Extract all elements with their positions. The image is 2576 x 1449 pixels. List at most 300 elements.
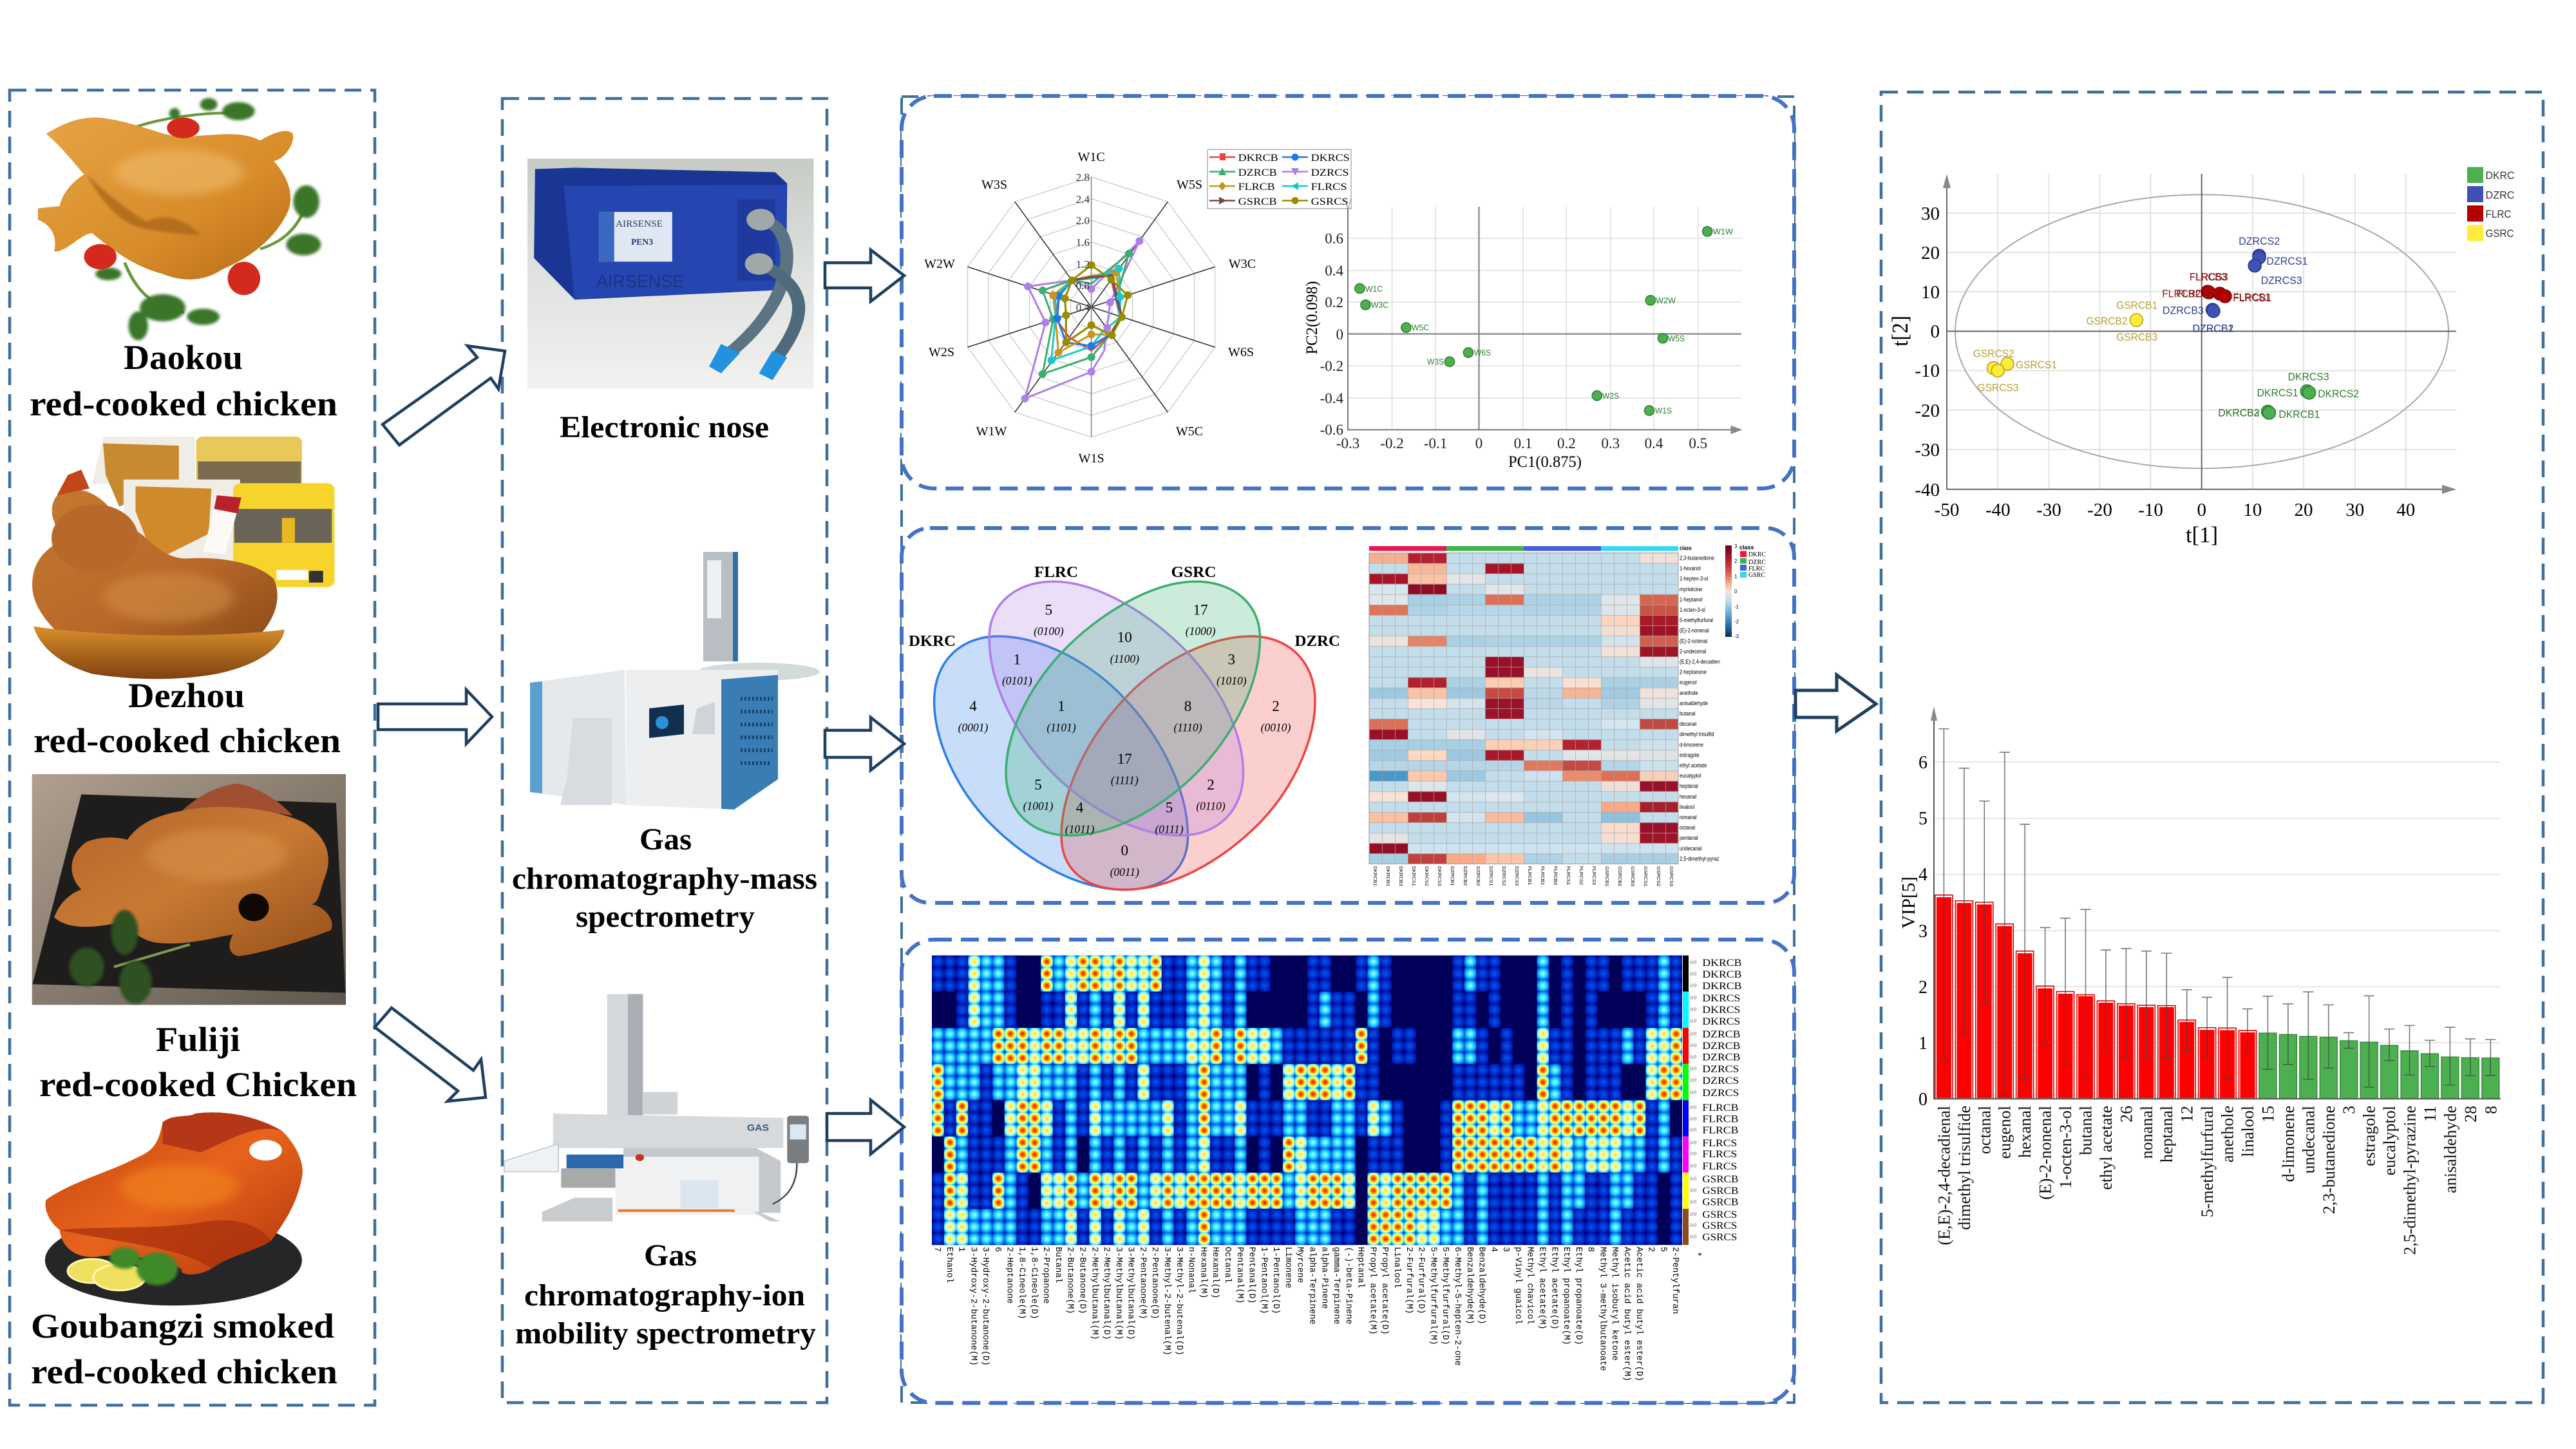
gallery plot sample labels: FLRCS <box>1702 1161 1737 1172</box>
point labels: W5C <box>1412 323 1429 332</box>
score point labels: DKRCB3 <box>2218 407 2259 419</box>
compound labels: dimethyl trisulfide <box>1955 1106 1974 1230</box>
y tick labels: 3 <box>1918 922 1927 942</box>
panel: chicken samples <box>10 90 375 1405</box>
radar vertical axis <box>1091 177 1092 437</box>
label: Gas (GC-IMS): Gas <box>644 1238 697 1273</box>
heatmap row labels: 5-methylfurfural <box>1680 616 1713 623</box>
heatmap row labels: butanal <box>1680 710 1696 717</box>
gallery plot 0/0 row markers: 0/0 <box>1690 1222 1696 1228</box>
compound labels: estragole <box>2360 1106 2379 1166</box>
Venn counts: 1 <box>1057 698 1065 714</box>
arrow: GC-MS to results <box>825 717 904 770</box>
arrow: results to multivariate analysis <box>1795 675 1876 731</box>
x tick labels: 0 <box>1475 435 1482 451</box>
x tick labels: 0 <box>2197 500 2206 520</box>
gallery plot compound labels: 5-Methylfurfural(D) <box>1440 1247 1450 1345</box>
gallery plot compound labels: Acetic acid butyl ester(M) <box>1622 1247 1631 1381</box>
class legend: class <box>1739 544 1754 551</box>
heatmap column labels <box>1372 866 1674 886</box>
gallery plot sample labels: DZRCB <box>1702 1052 1740 1063</box>
heatmap column labels: FLRCS3 <box>1591 866 1597 885</box>
y tick labels: 10 <box>1921 282 1940 303</box>
gallery plot 0/0 row markers: 0/0 <box>1690 1077 1696 1083</box>
gallery plot sample labels: FLRCS <box>1702 1138 1737 1149</box>
gallery plot compound labels: Heptanal <box>1356 1247 1365 1288</box>
confidence ellipse <box>1955 194 2448 468</box>
gallery plot compound labels: Propyl acetate(D) <box>1379 1247 1389 1335</box>
Venn counts: 17 <box>1193 601 1208 618</box>
gallery plot compound labels: Ethyl acetate(M) <box>1537 1247 1547 1330</box>
y tick labels: -20 <box>1915 401 1940 421</box>
compound labels: 3 <box>2340 1106 2358 1114</box>
score point labels: FLRCS1 <box>2233 291 2270 303</box>
gallery plot sample labels: FLRCB <box>1702 1125 1738 1136</box>
x tick labels: 40 <box>2396 500 2415 520</box>
heatmap row labels: anethole <box>1680 689 1698 696</box>
heatmap row labels: 1-heptanol <box>1680 596 1702 603</box>
radar tick labels: 2.4 <box>1076 193 1090 205</box>
x tick labels: -0.3 <box>1336 435 1359 451</box>
Venn region codes <box>958 625 1291 878</box>
radar axis labels: W3S <box>981 178 1007 192</box>
point labels: W6S <box>1474 348 1491 357</box>
gallery plot compound labels: Methyl 3-methylbutanoate <box>1597 1247 1607 1371</box>
radar legend: DKRCB <box>1238 153 1278 164</box>
gallery plot compound labels: Hexanal(M) <box>1198 1247 1208 1298</box>
radar axis labels: W2W <box>924 257 955 271</box>
radar series <box>1025 241 1139 399</box>
Venn region codes: (1011) <box>1065 822 1094 835</box>
heatmap row labels: dimethyl trisulfid <box>1680 730 1714 737</box>
Venn ellipses <box>934 582 1315 889</box>
heatmap column labels: FLRCB3 <box>1553 866 1558 885</box>
photo: Daokou red-cooked chicken <box>38 98 321 340</box>
arrow: GC-IMS to results <box>827 1100 904 1154</box>
x tick labels: 0.2 <box>1557 435 1576 451</box>
gallery plot sample labels: GSRCB <box>1702 1174 1738 1185</box>
score point labels: FLRCS3 <box>2190 270 2228 283</box>
stray marker: * <box>1698 1251 1702 1261</box>
gallery plot 0/0 row markers: 0/0 <box>1690 971 1696 977</box>
heatmap column labels: DZRCS2 <box>1501 866 1507 886</box>
point labels: W1C <box>1365 284 1383 294</box>
radar axis labels: W1W <box>976 424 1007 439</box>
gallery plot sample labels: DKRCB <box>1702 969 1741 980</box>
score point labels <box>1973 235 2359 421</box>
gallery plot 0/0 row markers: 0/0 <box>1690 1163 1696 1169</box>
gallery plot sample labels: FLRCB <box>1702 1114 1738 1124</box>
gallery plot sample labels: DZRCS <box>1702 1064 1739 1075</box>
score point labels: DZRCS1 <box>2266 255 2307 267</box>
Venn region codes: (0101) <box>1002 674 1032 687</box>
arrow: samples to electronic nose <box>383 346 505 445</box>
Venn counts <box>969 601 1280 858</box>
heatmap column labels: GSRCB1 <box>1604 866 1610 886</box>
radar tick labels: 0.4 <box>1076 301 1090 314</box>
gallery plot compound labels: 2 <box>1646 1247 1656 1252</box>
compound labels: octanal <box>1975 1106 1994 1154</box>
heatmap column labels: GSRCS2 <box>1656 866 1662 886</box>
y tick labels: -40 <box>1915 480 1940 500</box>
y tick labels: -10 <box>1915 361 1940 381</box>
heatmap column labels: DKRCB3 <box>1398 866 1404 886</box>
Venn counts: 8 <box>1184 698 1191 714</box>
gallery plot compound labels: Pentanal(M) <box>1235 1247 1244 1303</box>
class legend: FLRC <box>1748 565 1765 573</box>
gallery plot 0/0 row markers: 0/0 <box>1690 1031 1696 1037</box>
photo: GC-IMS instrument <box>504 994 809 1222</box>
gallery plot compound labels: 2-Pentanone(M) <box>1137 1247 1147 1319</box>
gallery plot compound labels: 3 <box>1501 1247 1510 1252</box>
Venn counts: 0 <box>1121 842 1128 858</box>
score point labels: GSRCS1 <box>2016 359 2057 371</box>
gallery plot compound labels: gamma-Terpinene <box>1331 1247 1341 1325</box>
brand text GAS: GAS <box>747 1122 769 1133</box>
score point labels: GSRCS2 <box>1973 348 2014 360</box>
gallery plot compound labels: 6 <box>992 1247 1002 1252</box>
y axis title: PC2(0.098) <box>1303 281 1321 354</box>
radar legend <box>1208 149 1351 209</box>
heatmap row labels: octanal <box>1680 824 1695 831</box>
gallery plot sample labels: DZRCB <box>1702 1041 1740 1052</box>
heatmap column labels: FLRCS2 <box>1578 866 1584 885</box>
gallery plot compound labels: 2-Butanone(D) <box>1077 1247 1087 1314</box>
radar axis labels: W1C <box>1077 150 1105 164</box>
group legend <box>2467 167 2514 241</box>
gallery plot compound labels: 5 <box>1658 1247 1667 1252</box>
heatmap row labels: class <box>1680 544 1692 551</box>
Venn counts: 5 <box>1034 777 1042 793</box>
x tick labels: 30 <box>2345 500 2364 520</box>
panel: analytical instruments <box>502 99 827 1403</box>
compound labels: nonanal <box>2137 1106 2156 1159</box>
compound labels: linalool <box>2239 1106 2257 1157</box>
Venn region codes: (1010) <box>1217 674 1247 687</box>
heatmap row labels: 2,3-butanedione <box>1680 554 1714 562</box>
compound labels: 15 <box>2259 1106 2277 1122</box>
y tick labels: 2 <box>1918 978 1927 998</box>
radar legend: FLRCB <box>1238 182 1275 193</box>
colour scale: 0 <box>1734 589 1738 594</box>
gallery plot sample labels: DZRCS <box>1702 1088 1739 1099</box>
compound labels: 2,3-butanedione <box>2320 1106 2338 1214</box>
compound labels: undecanal <box>2299 1106 2318 1173</box>
class legend: GSRC <box>1748 571 1765 579</box>
compound labels: 11 <box>2421 1106 2439 1122</box>
gallery plot sample labels: GSRCS <box>1702 1209 1737 1220</box>
heatmap row labels: myristicine <box>1680 585 1702 592</box>
gallery plot sample labels: GSRCB <box>1702 1186 1738 1197</box>
axes <box>1947 174 2456 489</box>
compound labels: eugenol <box>1996 1106 2014 1159</box>
gallery plot compound labels: 1-Pentanol(M) <box>1258 1247 1268 1314</box>
photo: electronic nose instrument <box>527 158 814 389</box>
radar axis labels: W5S <box>1177 178 1202 192</box>
gallery plot 0/0 row markers: 0/0 <box>1690 1176 1696 1182</box>
gallery plot 0/0 row markers: 0/0 <box>1690 1199 1696 1205</box>
Venn region codes: (0110) <box>1196 800 1226 813</box>
score point labels: DZRCS3 <box>2261 274 2302 287</box>
y tick labels: -0.2 <box>1320 358 1343 374</box>
heatmap column labels: DKRCB1 <box>1372 866 1378 886</box>
heatmap column labels: DZRCB1 <box>1450 866 1455 886</box>
radar tick labels: 2.0 <box>1076 214 1090 227</box>
gallery plot 0/0 row markers: 0/0 <box>1690 1054 1696 1060</box>
y tick labels <box>1918 753 1927 1110</box>
Venn region codes: (1111) <box>1111 773 1139 786</box>
heatmap row labels: undecanal <box>1680 844 1702 852</box>
class legend: DKRC <box>1748 551 1766 558</box>
photo: GC-MS instrument <box>530 552 820 810</box>
compound labels: heptanal <box>2157 1106 2176 1162</box>
y tick labels: -30 <box>1915 440 1940 460</box>
x tick labels: -20 <box>2087 500 2112 520</box>
gallery plot sample labels: DZRCB <box>1702 1029 1740 1040</box>
gallery plot 0/0 row markers: 0/0 <box>1690 1090 1696 1095</box>
gallery plot compound labels: 2-Methylbutanal(M) <box>1089 1247 1099 1340</box>
gallery plot compound labels: Linalool <box>1392 1247 1401 1288</box>
Venn set names: DKRC <box>909 633 956 650</box>
x tick labels: 0.1 <box>1514 435 1532 451</box>
panel: GC-IMS gallery plot <box>902 940 1794 1403</box>
horizontal grid <box>1934 762 2501 1043</box>
compound labels: (E)-2-nonenal <box>2036 1106 2055 1200</box>
gallery plot compound labels: 4 <box>1488 1247 1498 1252</box>
y tick labels <box>1320 231 1343 438</box>
gallery plot compound labels: 1,8-Cineole(D) <box>1028 1247 1038 1319</box>
gallery plot sample labels: DKRCB <box>1702 981 1741 992</box>
score point labels: FLRCS2 <box>2177 287 2215 300</box>
heatmap row labels <box>1680 544 1720 862</box>
point labels <box>1365 227 1734 415</box>
Venn counts: 4 <box>969 698 977 714</box>
Venn region codes: (1110) <box>1173 721 1202 734</box>
y tick labels: 0 <box>1336 327 1343 343</box>
x tick labels: 10 <box>2243 500 2262 520</box>
gallery plot compound labels: 2-Butanone(M) <box>1065 1247 1075 1314</box>
gallery plot 0/0 row markers: 0/0 <box>1690 1211 1696 1217</box>
Venn set names: FLRC <box>1034 564 1078 581</box>
gallery plot sample labels: DZRCS <box>1702 1075 1739 1086</box>
gallery plot compound labels: n-Nonanal <box>1186 1247 1196 1293</box>
heatmap column labels: DKRCS2 <box>1424 866 1430 886</box>
photo: Dezhou red-cooked chicken <box>32 437 334 679</box>
gallery plot compound labels: Butanal <box>1053 1247 1063 1283</box>
gallery plot compound labels: Ethanol <box>944 1247 954 1283</box>
panel: multivariate analysis <box>1881 92 2543 1403</box>
heatmap row labels: 2-heptanone <box>1680 668 1707 676</box>
score point labels: FLRCB3 <box>2190 270 2227 283</box>
score point labels: DKRCB2 <box>2218 407 2259 419</box>
Venn region codes: (1000) <box>1186 625 1216 638</box>
gallery plot compound labels: Propyl acetate(M) <box>1367 1247 1377 1335</box>
gallery plot compound labels: Ethyl propanoate(D) <box>1573 1247 1583 1345</box>
chart: VIP bar chart <box>1899 706 2501 1255</box>
gallery plot compound labels: Ethyl acetate(D) <box>1549 1247 1558 1330</box>
gallery plot 0/0 row markers: 0/0 <box>1690 1140 1696 1146</box>
heatmap row labels: decanal <box>1680 720 1696 727</box>
heatmap column labels: GSRCB3 <box>1630 866 1636 886</box>
Venn region codes: (1100) <box>1110 652 1139 665</box>
colour scale: 1 <box>1734 574 1738 580</box>
compound labels: eucalyptol <box>2380 1106 2399 1175</box>
Venn set names <box>909 564 1340 650</box>
heatmap column labels: DZRCB2 <box>1463 866 1468 886</box>
gallery plot compound labels: 2-Pentylfuran <box>1670 1247 1680 1314</box>
radar tick labels: 1.6 <box>1076 236 1090 249</box>
grid lines <box>1947 174 2456 489</box>
heatmap column labels: GSRCS1 <box>1643 866 1649 886</box>
loading points <box>1355 227 1712 415</box>
x tick labels: -50 <box>1935 500 1959 520</box>
y tick labels: -0.4 <box>1320 390 1343 406</box>
gallery plot compound labels: p-Vinyl guaicol <box>1513 1247 1522 1325</box>
score point labels: GSRCB3 <box>2116 331 2157 343</box>
Venn region codes: (0010) <box>1261 721 1291 734</box>
x tick labels: -40 <box>1985 500 2011 520</box>
photo: Goubangzi smoked red-cooked chicken <box>45 1112 303 1305</box>
gallery plot compound labels: 7 <box>932 1247 942 1252</box>
y axis title: VIP[5] <box>1899 876 1919 929</box>
radar rings <box>967 177 1215 437</box>
group legend: DZRC <box>2486 189 2514 201</box>
gallery plot 0/0 row markers: 0/0 <box>1690 983 1696 989</box>
score point labels: DZRCB3 <box>2163 304 2204 317</box>
gallery plot 0/0 row markers: 0/0 <box>1690 1018 1696 1024</box>
Venn counts: 10 <box>1117 629 1132 645</box>
gallery plot compound labels: Methyl isobutyl ketone <box>1609 1247 1619 1361</box>
gallery plot compound labels: Hexanal(D) <box>1210 1247 1220 1298</box>
heatmap row labels: 1-octen-3-ol <box>1680 606 1705 613</box>
heatmap column labels: FLRCB1 <box>1527 866 1533 885</box>
point labels: W1W <box>1713 227 1734 236</box>
x tick labels: -10 <box>2138 500 2163 520</box>
gallery plot compound labels: 1-Pentanol(D) <box>1271 1247 1280 1314</box>
compound labels: anethole <box>2219 1106 2237 1162</box>
score point labels: DKRCS3 <box>2288 371 2329 383</box>
chart: PCA loading plot <box>1303 198 1741 471</box>
score point labels: DKRCB1 <box>2278 408 2320 421</box>
class bar <box>1369 546 1678 551</box>
gallery plot compound labels: 2-Methylbutanal(D) <box>1101 1247 1111 1340</box>
x tick labels: -30 <box>2036 500 2061 520</box>
Venn counts: 5 <box>1166 800 1173 816</box>
x tick labels: 0.4 <box>1645 435 1663 451</box>
radar legend: DZRCB <box>1238 167 1277 178</box>
heatmap column labels: FLRCB2 <box>1540 866 1546 885</box>
heatmap row labels: nonanal <box>1680 813 1697 820</box>
gallery plot 0/0 row markers: 0/0 <box>1690 1007 1696 1012</box>
label: chromatography-mass: chromatography-mass <box>512 862 817 896</box>
radar axis labels: W1S <box>1079 451 1104 466</box>
Venn region codes: (0100) <box>1034 625 1064 638</box>
gallery plot fingerprint cells <box>932 956 1682 1245</box>
class legend <box>1739 544 1766 579</box>
Venn region codes: (1001) <box>1023 800 1053 813</box>
compound labels: 2,5-dimethyl-pyrazine <box>2401 1106 2419 1255</box>
compound labels: (E,E)-2,4-decadienal <box>1935 1106 1953 1245</box>
heatmap row labels: 2-undecenal <box>1680 647 1706 655</box>
label: Goubangzi smoked: Goubangzi smoked <box>31 1307 334 1345</box>
zero lines and axes <box>1348 207 1741 430</box>
gallery plot sample labels: GSRCB <box>1702 1197 1738 1208</box>
score point labels: GSRCB2 <box>2087 315 2128 327</box>
y axis arrowhead <box>1931 706 1937 721</box>
point labels: W2S <box>1602 391 1619 401</box>
heatmap row labels: 1-hepten-3-ol <box>1680 575 1709 582</box>
score point labels: FLRCB1 <box>2233 292 2271 304</box>
heatmap row labels: (E)-2-octenal <box>1680 637 1707 645</box>
Venn counts: 5 <box>1045 601 1052 618</box>
radar tick labels: 1.2 <box>1076 258 1090 270</box>
Venn region codes: (0001) <box>958 721 988 734</box>
y tick labels: 6 <box>1918 753 1927 773</box>
compound labels: 5-methylfurfural <box>2198 1106 2217 1217</box>
Venn counts: 1 <box>1014 652 1021 667</box>
gallery plot 0/0 row markers: 0/0 <box>1690 1043 1696 1048</box>
score point labels: DZRCB2 <box>2192 323 2233 335</box>
colour scale: 2 <box>1734 558 1738 564</box>
panel: data analysis column <box>902 97 1794 1403</box>
chart: Venn diagram <box>909 564 1340 889</box>
x tick labels <box>1935 500 2415 520</box>
radar axis labels: W5C <box>1176 424 1203 439</box>
label: Fuliji red-cooked Chicken: red-cooked Chicken <box>39 1065 357 1104</box>
compound labels: butanal <box>2076 1106 2096 1155</box>
gallery plot compound labels: 3-Methyl-2-butenal(D) <box>1174 1247 1184 1356</box>
point labels: W1S <box>1655 406 1672 415</box>
gallery plot compound labels: 2-Propanone <box>1041 1247 1050 1303</box>
radar tick labels: 0.8 <box>1076 279 1090 292</box>
heatmap row labels: eugenol <box>1680 679 1697 686</box>
bars and error bars <box>1935 729 2499 1099</box>
gallery plot compound labels: 3-Hydroxy-2-butanone(D) <box>980 1247 990 1366</box>
y tick labels: 0.4 <box>1325 263 1343 279</box>
radar legend: GSRCS <box>1311 196 1349 207</box>
gallery plot compound labels <box>932 1247 1680 1381</box>
heatmap row labels: 1-hexanol <box>1680 565 1701 572</box>
point labels: W3S <box>1427 357 1444 366</box>
gallery plot 0/0 row markers: 0/0 <box>1690 1234 1696 1240</box>
radar legend: GSRCB <box>1238 196 1277 207</box>
gallery plot sample labels: FLRCB <box>1702 1103 1738 1113</box>
photo: Fuliji red-cooked chicken <box>32 774 346 1005</box>
group legend: FLRC <box>2486 208 2512 220</box>
heatmap column labels: GSRCS3 <box>1669 866 1674 886</box>
gallery plot compound labels: Limonene <box>1283 1247 1293 1288</box>
x tick labels: -0.1 <box>1424 435 1447 451</box>
arrow: electronic nose to results <box>825 250 904 301</box>
score point labels: FLRCB2 <box>2162 287 2201 300</box>
y tick labels: 5 <box>1918 809 1927 829</box>
gallery plot compound labels: 3-Hydroxy-2-butanone(M) <box>968 1247 978 1366</box>
compound labels: d-limonene <box>2279 1106 2298 1182</box>
y axis title: t[2] <box>1888 316 1913 346</box>
heatmap row labels: anisaldehyde <box>1680 699 1708 706</box>
heatmap row labels: linalool <box>1680 803 1694 810</box>
axis arrowheads <box>1943 174 2456 494</box>
instrument screen text AIRSENSE: AIRSENSE <box>616 219 663 229</box>
label: Dezhou red-cooked chicken: red-cooked chicken <box>33 721 341 760</box>
gallery plot 0/0 row markers: 0/0 <box>1690 1104 1696 1110</box>
label: Fuliji: Fuliji <box>156 1020 240 1059</box>
gallery plot compound labels: Myrcene <box>1295 1247 1305 1283</box>
score point labels: GSRCB1 <box>2116 299 2157 312</box>
gallery plot sample labels: DKRCB <box>1702 958 1741 969</box>
colour scale: -1 <box>1734 604 1739 610</box>
gallery plot compound labels: alpha-Terpinene <box>1307 1247 1316 1325</box>
